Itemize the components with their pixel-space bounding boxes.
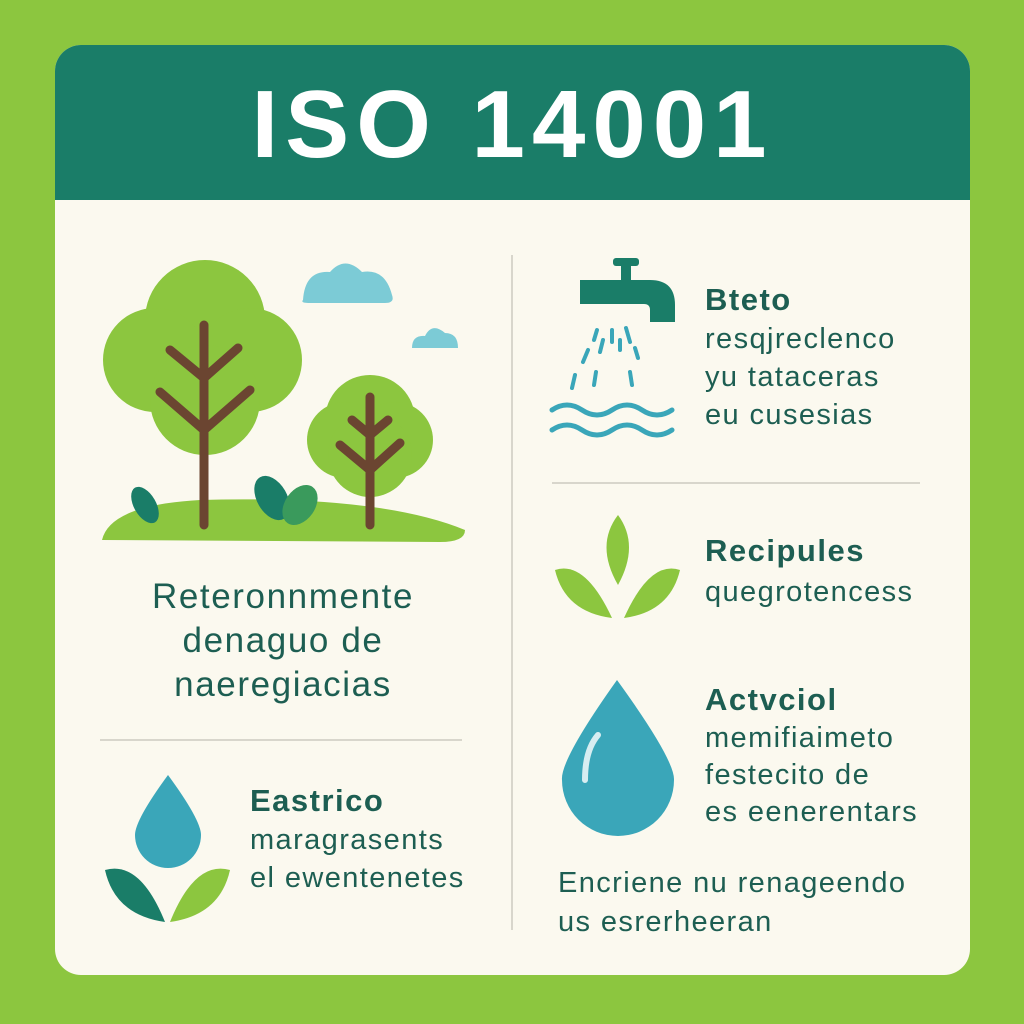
text: left main: naeregiacias <box>174 665 392 704</box>
text: drop block <box>705 682 918 828</box>
title <box>55 45 970 200</box>
text: leaves block <box>705 533 913 608</box>
text: left main <box>152 577 414 704</box>
text: faucet block: resqjreclenco <box>705 323 896 355</box>
text: drop block: memifiaimeto <box>705 722 894 754</box>
icon: faucet <box>552 258 675 435</box>
text: leaves block: Recipules <box>705 533 865 568</box>
text: left bottom: Eastrico <box>250 783 384 818</box>
title: ISO 14001 <box>252 71 774 178</box>
icon: drop with leaves <box>105 775 230 922</box>
text: bottom right: Encriene nu renageendo <box>558 867 906 899</box>
icon: water drop <box>562 680 674 836</box>
text: drop block: Actvciol <box>705 682 838 717</box>
icon: trees landscape <box>102 260 465 542</box>
text: left main: Reteronnmente <box>152 577 414 616</box>
text: left main: denaguo de <box>183 621 383 660</box>
text: leaves block: quegrotencess <box>705 576 913 608</box>
text: bottom right <box>558 867 906 938</box>
text: bottom right: us esrerheeran <box>558 906 773 938</box>
text: left bottom <box>250 783 465 894</box>
text: left bottom: maragrasents <box>250 824 444 856</box>
text: faucet block: Bteto <box>705 282 792 317</box>
text: faucet block: yu tataceras <box>705 361 880 393</box>
text: drop block: festecito de <box>705 759 870 791</box>
text: drop block: es eenerentars <box>705 796 918 828</box>
icon: leaves <box>555 515 680 618</box>
text: faucet block: eu cusesias <box>705 399 874 431</box>
text: faucet block <box>705 282 896 431</box>
text: left bottom: el ewentenetes <box>250 862 465 894</box>
